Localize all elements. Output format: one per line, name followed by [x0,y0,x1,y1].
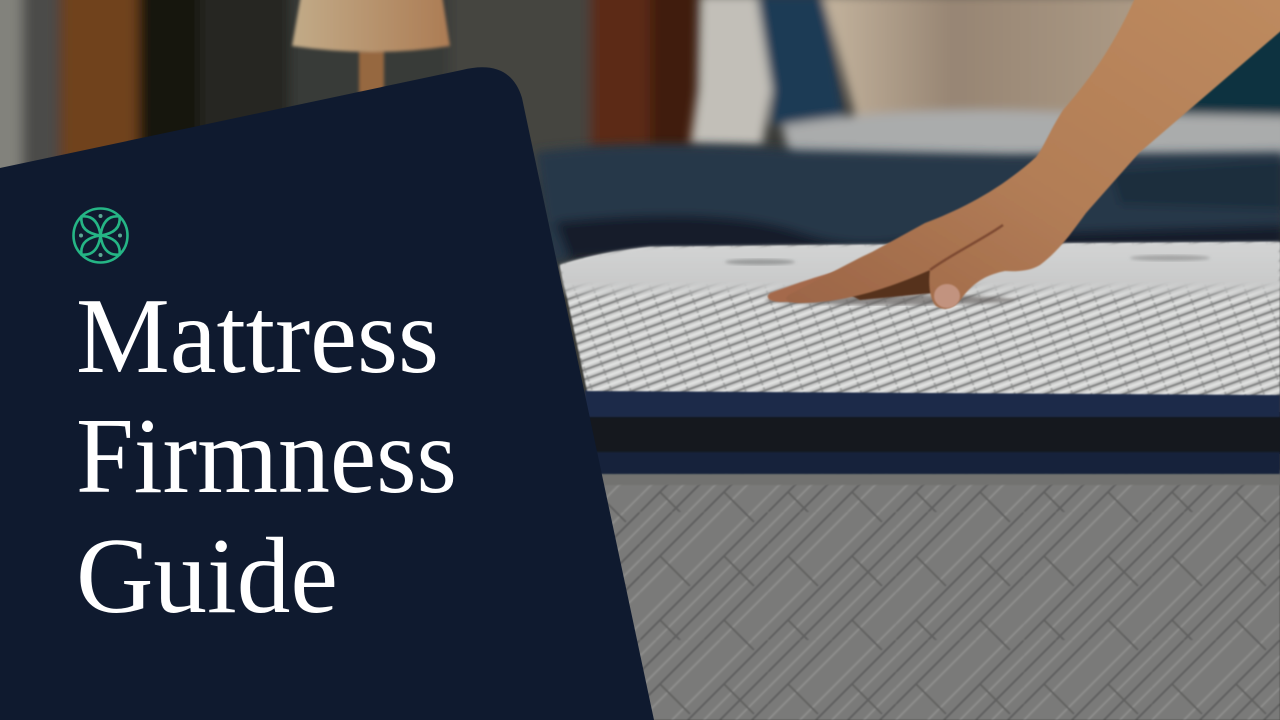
title: Guide [76,517,338,636]
photo: navy blanket [535,144,1280,264]
photo: quilted mattress top [560,242,1280,395]
dark band [585,412,1280,454]
back finger [768,262,890,302]
photo: hand pressing mattress [765,0,1280,309]
title: Firmness [76,397,457,516]
gap under palm [850,265,945,300]
piping [585,390,1280,417]
herringbone fabric [590,470,1280,720]
knuckle crease [930,225,1003,270]
icon: green flower logo [74,208,128,262]
title [76,277,457,636]
thumbnail [934,284,960,308]
photo: mattress side panel [585,390,1280,720]
title: Mattress [76,277,439,396]
navy title panel [0,67,654,720]
arm, hand and thumb [786,0,1280,309]
photo: pillows [690,0,1280,160]
photo: table lamp [292,0,450,94]
